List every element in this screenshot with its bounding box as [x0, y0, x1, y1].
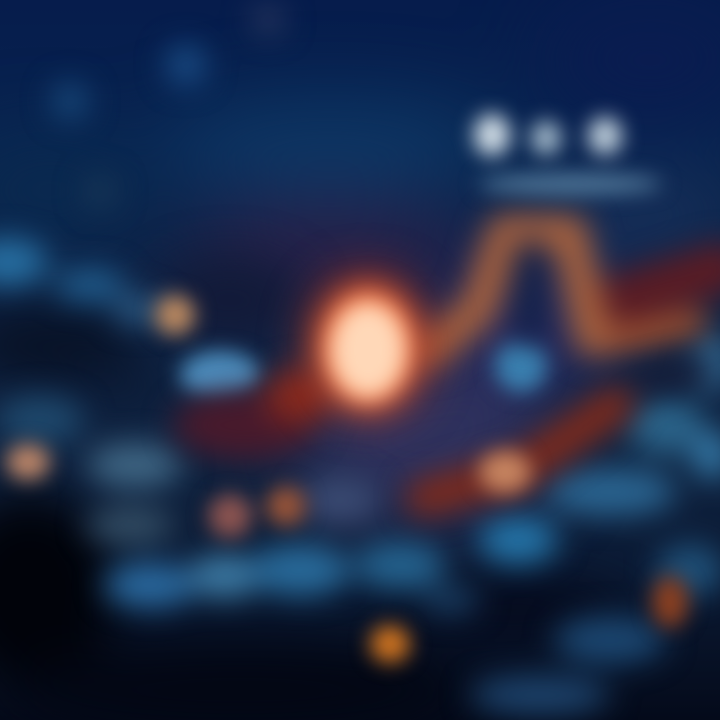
dark red hill	[173, 368, 332, 459]
brown ridge	[425, 370, 700, 498]
sky tones	[0, 0, 720, 520]
warm lights	[6, 295, 688, 663]
dark shadows	[0, 260, 630, 720]
mountain arch	[430, 232, 720, 350]
blue highlights	[180, 340, 547, 399]
stars	[52, 6, 284, 208]
sun glow	[310, 277, 426, 413]
title glow: three bright marks and subtitle band	[474, 114, 662, 195]
blue clouds	[0, 238, 720, 715]
